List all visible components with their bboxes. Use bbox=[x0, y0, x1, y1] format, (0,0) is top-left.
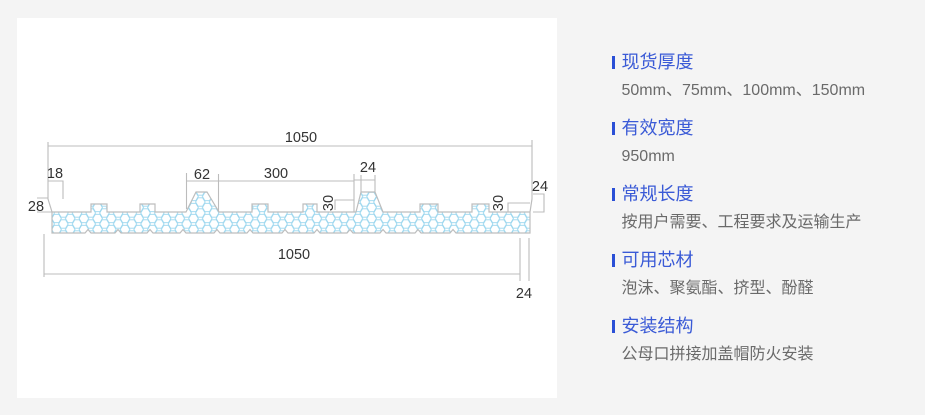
spec: thickness bbox=[612, 52, 865, 99]
dimension labels: 30 bbox=[321, 195, 337, 211]
spec: thickness: 现货厚度 bbox=[622, 52, 694, 72]
dimension labels: 24 bbox=[360, 160, 376, 176]
spec: core materials: 泡沫、聚氨酯、挤型、酚醛 bbox=[622, 280, 814, 297]
dimension labels bbox=[28, 130, 548, 302]
dimension labels: 28 bbox=[28, 199, 44, 215]
dimension labels: 18 bbox=[47, 166, 63, 182]
dimension labels: 24 bbox=[516, 286, 532, 302]
panel: diagram background bbox=[17, 18, 557, 398]
spec: core materials bbox=[612, 250, 814, 297]
spec: regular length: 按用户需要、工程要求及运输生产 bbox=[622, 214, 862, 231]
spec: thickness: 50mm、75mm、100mm、150mm bbox=[622, 82, 865, 99]
spec: installation structure: 安装结构 bbox=[622, 316, 694, 336]
dimension labels: 1050 bbox=[285, 130, 317, 146]
cross-section dimension diagram bbox=[28, 132, 548, 298]
dimension labels: 62 bbox=[194, 167, 210, 183]
panel profile outline bbox=[48, 192, 532, 233]
dimension labels: 300 bbox=[264, 166, 288, 182]
sandwich panel core bbox=[48, 190, 532, 235]
dimension lines bbox=[37, 140, 544, 281]
dimension labels: 24 bbox=[532, 179, 548, 195]
spec: core materials: 可用芯材 bbox=[622, 250, 694, 270]
dimension labels: 1050 bbox=[278, 247, 310, 263]
spec: effective width: 950mm bbox=[622, 148, 675, 165]
spec: installation structure bbox=[612, 316, 814, 363]
spec: effective width: 有效宽度 bbox=[622, 118, 694, 138]
spec: regular length bbox=[612, 184, 862, 231]
spec: regular length: 常规长度 bbox=[622, 184, 694, 204]
dimension labels: 30 bbox=[491, 195, 507, 211]
spec: effective width bbox=[612, 118, 694, 165]
spec: installation structure: 公母口拼接加盖帽防火安装 bbox=[622, 346, 814, 363]
